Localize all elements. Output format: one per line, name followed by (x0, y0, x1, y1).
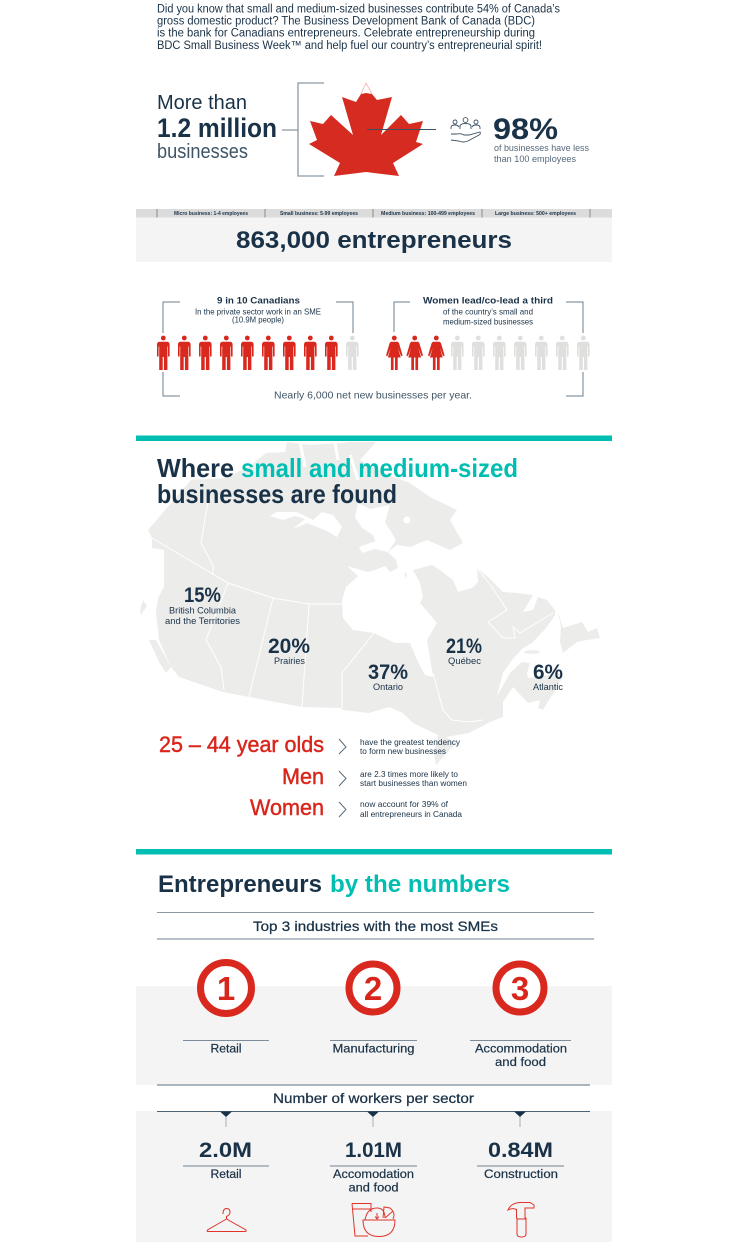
label: manufacturing: Manufacturing (332, 1044, 414, 1056)
pointers (220, 1112, 526, 1127)
demographic row: women: now account for 39% of (360, 800, 449, 809)
stat: accommodation workers: and food (348, 1183, 398, 1195)
text: 9 in 10 Canadians (195, 296, 321, 324)
heading: entrepreneurs by the numbers (158, 871, 510, 898)
map label: Atlantic: 6% (533, 661, 563, 684)
icon: maple leaf (309, 83, 436, 176)
map: Canada (140, 442, 600, 765)
icon: hammer (508, 1202, 534, 1237)
bracket connector (282, 83, 324, 176)
text: women lead: Women lead/co-lead a third (423, 296, 553, 306)
label: manufacturing (330, 1040, 417, 1056)
intro text (157, 4, 560, 52)
text: women lead: of the country’s small and (443, 306, 533, 316)
map label: British Columbia: and the Territories (165, 616, 240, 627)
demographic row: men: start businesses than women (360, 779, 467, 788)
map label: Prairies: Prairies (274, 656, 305, 667)
demographic row: women: Women (250, 795, 324, 820)
intro text: is the bank for Canadians entrepreneurs. Celebrate entrepreneurship during (157, 28, 535, 40)
map label: Atlantic: Atlantic (533, 682, 563, 693)
map label: British Columbia (165, 584, 240, 627)
stat: construction workers: Construction (484, 1169, 558, 1181)
label: retail: Retail (210, 1044, 242, 1056)
icon: number 1: 1 (217, 970, 235, 1007)
label: accommodation and food: and food (495, 1057, 546, 1069)
icon: number 3 (496, 964, 544, 1012)
label: accommodation and food: Accommodation (475, 1044, 567, 1056)
stat: construction workers (477, 1139, 564, 1181)
stat: accommodation workers (330, 1139, 417, 1195)
demographic row: men (282, 764, 467, 789)
stat: 1.2 million businesses: More than (157, 92, 247, 114)
subheading: top 3 industries: Top 3 industries with the most SMEs (253, 918, 498, 934)
map label: Quebec: Québec (448, 656, 481, 667)
section divider (136, 849, 612, 854)
intro text: Did you know that small and medium-sized businesses contribute 54% of Canada’s (157, 4, 560, 16)
panel: business size scale and entrepreneurs: Micro business: 1-4 employees (174, 211, 248, 217)
panel: business size scale and entrepreneurs: 863,000 entrepreneurs (236, 227, 512, 254)
icon: clothes hanger (207, 1208, 246, 1232)
icon: number 2: 2 (364, 970, 382, 1007)
icon: number 3: 3 (511, 970, 529, 1007)
panel: top 3 background (136, 986, 612, 1085)
map label: Ontario (368, 661, 408, 693)
text: 9 in 10 Canadians: (10.9M people) (232, 314, 284, 324)
icon: people over hand (451, 118, 480, 142)
section divider (136, 436, 612, 441)
stat: retail workers: Retail (210, 1169, 242, 1181)
icon: number 2 (349, 964, 397, 1012)
text: net new businesses: Nearly 6,000 net new businesses per year. (274, 390, 472, 402)
stat: 1.2 million businesses (157, 92, 277, 163)
heading: where businesses are found: businesses are found (157, 479, 397, 509)
subheading: number of workers per sector: Number of workers per sector (273, 1091, 475, 1106)
stat: construction workers: 0.84M (488, 1139, 553, 1162)
demographic row: women: all entrepreneurs in Canada (360, 810, 463, 819)
text: women lead: medium-sized businesses (443, 316, 533, 326)
label: accommodation and food (470, 1040, 571, 1069)
map label: Ontario: 37% (368, 661, 408, 684)
stat: accommodation workers: Accomodation (333, 1169, 414, 1181)
demographic row: women (250, 795, 463, 820)
heading: where businesses are found: small and medium-sized (241, 453, 518, 483)
icon: drink and salad bowl (352, 1204, 395, 1236)
heading: where businesses are found: Where (157, 453, 234, 483)
demographic row: men: Men (282, 764, 324, 789)
label: retail (183, 1040, 269, 1056)
map label: Quebec (446, 635, 482, 667)
map label: Prairies: 20% (268, 635, 310, 658)
text: women lead (423, 296, 553, 326)
stat: 98%: 98% (493, 113, 558, 146)
icon: number 1 (200, 962, 252, 1014)
panel: workers per sector background (136, 1111, 612, 1242)
stat: 98%: than 100 employees (494, 154, 576, 165)
panel: business size scale and entrepreneurs: Large business: 500+ employees (495, 211, 576, 217)
stat: 1.2 million businesses: 1.2 million (157, 113, 277, 143)
demographic row: 25-44 year olds (159, 732, 460, 757)
heading: entrepreneurs by the numbers: by the numbers (330, 871, 510, 898)
stat: 98% (493, 113, 589, 165)
stat: retail workers: 2.0M (199, 1139, 252, 1162)
demographic row: 25-44 year olds: 25 – 44 year olds (159, 732, 324, 757)
stat: 98%: of businesses have less (494, 143, 589, 154)
text: 9 in 10 Canadians: 9 in 10 Canadians (217, 296, 300, 306)
stat: retail workers (183, 1139, 269, 1181)
demographic row: 25-44 year olds: have the greatest tendency (360, 738, 460, 747)
intro text: gross domestic product? The Business Development Bank of Canada (BDC) (157, 16, 535, 28)
map label: British Columbia: 15% (184, 584, 221, 607)
map label: Ontario: Ontario (373, 682, 403, 693)
map label: British Columbia: British Columbia (169, 606, 237, 617)
pictogram: 9 of 10 people (157, 336, 359, 370)
panel: business size scale and entrepreneurs: Medium business: 100-499 employees (381, 211, 475, 217)
demographic row: 25-44 year olds: to form new businesses (360, 747, 446, 756)
demographic row: men: are 2.3 times more likely to (360, 770, 459, 779)
heading: where businesses are found (157, 453, 518, 509)
brackets around people charts (163, 302, 583, 396)
panel: business size scale and entrepreneurs (136, 209, 612, 262)
heading: entrepreneurs by the numbers: Entrepreneurs (158, 871, 322, 898)
stat: 1.2 million businesses: businesses (157, 141, 248, 163)
panel: business size scale and entrepreneurs: Small business: 5-99 employees (280, 211, 358, 217)
pictogram: women, 3 of 10 (386, 336, 590, 370)
text: 9 in 10 Canadians: In the private sector work in an SME (195, 306, 321, 316)
stat: accommodation workers: 1.01M (345, 1139, 402, 1162)
map label: Quebec: 21% (446, 635, 482, 658)
intro text: BDC Small Business Week™ and help fuel our country’s entrepreneurial spirit! (157, 40, 542, 52)
